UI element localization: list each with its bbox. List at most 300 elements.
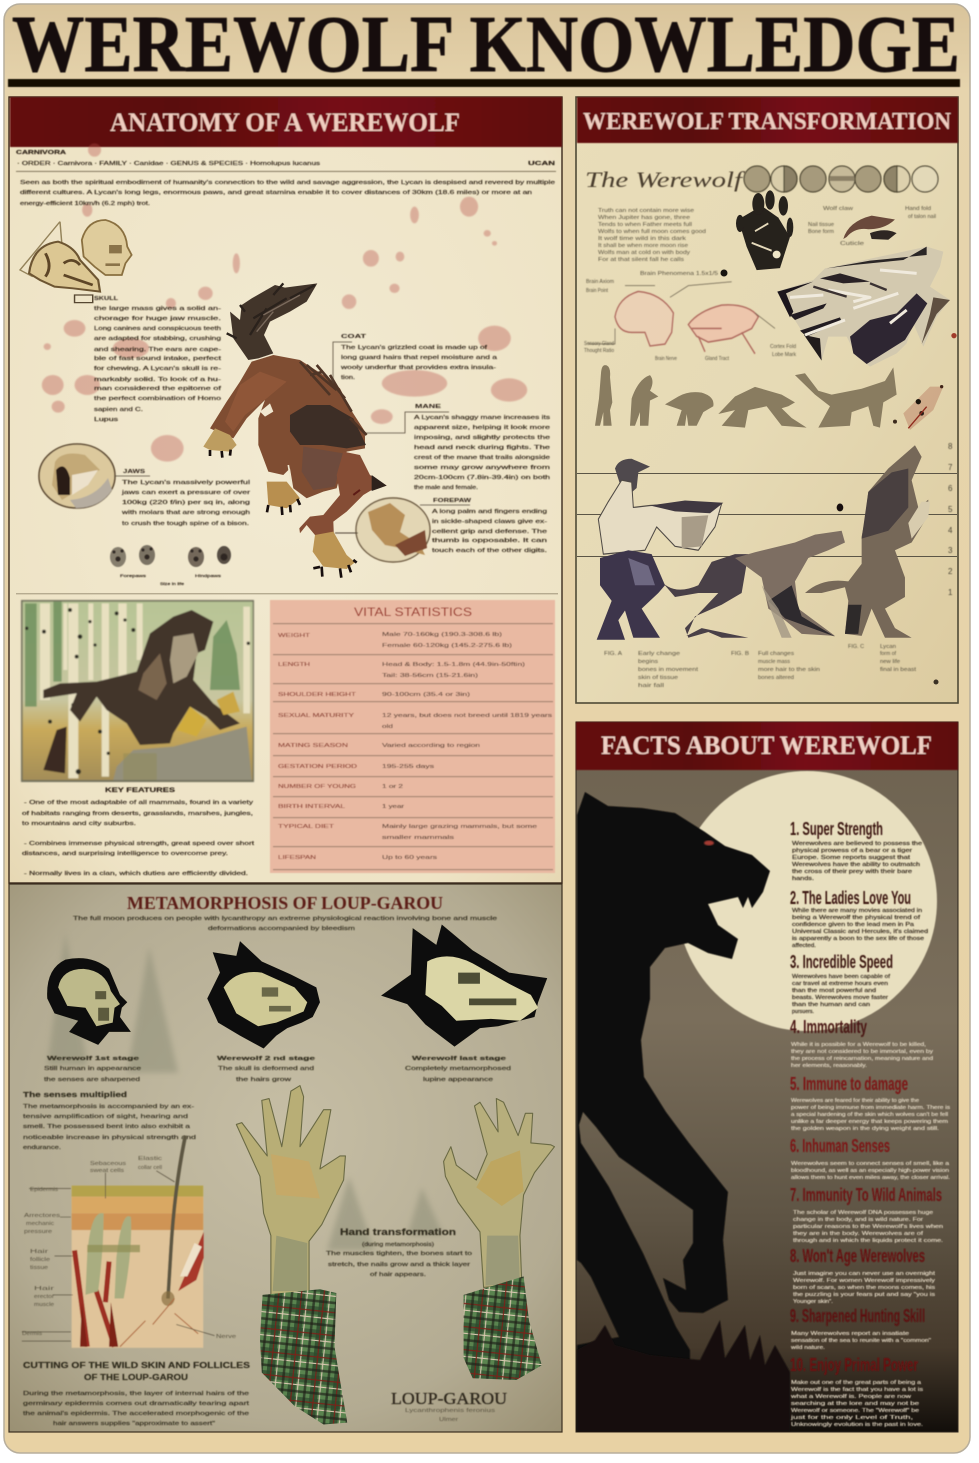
fact 5: immune to damage: unlike a far deeper energy that keeps powering them [791,1119,948,1125]
skin diagram labels: Epidermis [30,1187,59,1193]
chart: brain and heart diagrams: Lobe Mark [772,352,797,358]
sketch captions: skin of tissue [638,675,678,681]
stats table rows: SEXUAL MATURITY [278,713,354,719]
fact 1: super strength: physical prowess of a bear or a tiger [792,848,912,854]
caption: stage 1: Werewolf 1st stage [47,1056,140,1062]
stats table rows: GESTATION PERIOD [278,764,357,770]
text block: senses multiplied: noticeable increase in physical strength and [23,1135,196,1141]
illustration: full moon [677,771,937,1031]
taxonomy line [16,150,556,172]
text block: jaws: The Lycan's massively powerful [122,480,250,486]
fact 10: enjoy primal power: Werewolf is the fact that you have a lot is [791,1387,924,1393]
small sketch labels: Nail tissue [808,222,834,228]
text block: handwritten verse: It wolf time wild in this dark [598,236,687,242]
fact 9: sharpened hunting skill: Many Werewolves report an insatiate [791,1331,909,1337]
text block: cutting of the wild skin: hair answers supplies "approximate to assert" [53,1421,215,1427]
illustration: skull stage 1 [47,958,131,1045]
text block: mane: the male and female. [414,485,478,491]
fact 3: incredible speed: than the most powerful and [792,988,876,994]
fact 1: super strength [790,819,922,882]
loup-garou wordmark: Ulmer [439,1417,458,1423]
misty forest background [47,932,444,1250]
fact 6: inhuman senses: 6. Inhuman Senses [790,1136,890,1156]
fact 10: enjoy primal power [789,1355,924,1428]
text block: mane: MANE [415,404,442,410]
stats table rows: old [382,724,393,730]
intro paragraph: energy-efficient 10km/h (6.2 mph) trot. [20,201,150,207]
fact 2: the ladies love you: being a Werewolf the physical trend of [792,915,921,921]
sketch captions: FIG. B [731,651,750,657]
stats table rows: 1 or 2 [382,784,403,790]
skin diagram labels: Hair [34,1286,55,1292]
fact 1: super strength: Werewolves are believed to possess the [792,841,922,847]
text block: senses multiplied: endurance. [23,1145,61,1151]
illustration: bloody claw sketch [843,216,897,240]
loup-garou wordmark: Lycanthrophenis feronius [405,1408,496,1414]
stats table rows: 195-255 days [382,764,434,770]
text block: senses multiplied: tensive amplification of sight, hearing and [23,1114,188,1120]
fact 1: super strength: the cross of their prey with their bare [792,869,912,875]
illustration: clawed hand in plaid sleeve [444,1099,554,1380]
text block: key features: of habitats ranging from deserts, grasslands, marshes, jungles, [22,811,253,817]
illustration: snarling wolf head [777,247,950,367]
sketch captions: final in beast [880,667,917,673]
text block: cutting of the wild skin: During the metamorphosis, the layer of internal hairs of the [23,1391,249,1397]
fact 5: immune to damage: 5. Immune to damage [790,1074,908,1094]
text block: handwritten verse: Tends to when Father meets full [598,222,692,228]
skin diagram labels: Dermis [22,1331,43,1337]
fact 10: enjoy primal power: what a Werewolf is. People are now [791,1394,912,1400]
fact 2: the ladies love you [790,888,928,949]
fact 9: sharpened hunting skill [790,1306,931,1351]
skin diagram labels: erector [34,1294,54,1300]
caption: final stage: Werewolf last stage [412,1056,507,1062]
heading bar: transformation: WEREWOLF TRANSFORMATION [583,109,952,135]
skin diagram labels: sweat cells [90,1168,125,1174]
intro paragraph: Seen as both the spiritual embodiment of humanity's connection to the wild and savage aggression, the Lycan is despised and revered by multiple [20,180,555,186]
sketch captions: Early change [638,651,680,657]
text block: senses multiplied [23,1092,196,1151]
text block: handwritten verse: Wolfs to when full moon comes good [598,229,706,235]
heading bar: transformation [577,97,958,143]
fact 7: immunity to wild animals: The scholar of Werewolf DNA possesses huge [793,1210,933,1216]
stats table rows: LENGTH [278,662,310,668]
text block: skull: Long canines and conspicuous teeth [94,326,221,332]
fact 2: the ladies love you: is apparently a boon to the sex life of those [792,936,924,942]
panel: facts about werewolf [576,722,958,1432]
chart: brain and heart diagrams: Brain Nerve [655,356,677,362]
height scale numbers: 8 [948,442,953,451]
text block: skull [94,296,222,423]
fact 7: immunity to wild animals: particular reasons to the Werewolf's lives when [793,1224,943,1230]
stats table rows: 90-100cm (35.4 or 3in) [382,692,470,698]
illustration: skull stage 3 [381,924,547,1047]
fact 4: immortality: While it is possible for a Werewolf to be killed, [791,1042,926,1048]
fact 10: enjoy primal power: just for the only Level of Truth, [789,1415,913,1421]
stats table rows: 1 year [382,804,404,810]
text block: cutting of the wild skin: the animal's epidermis. The accelerated morphogenic of the [23,1411,249,1417]
fact 5: immune to damage: the golden weapon in the dying weight and still. [791,1126,939,1132]
stats table rows: NUMBER OF YOUNG [278,784,356,790]
fact 8: won't age: the puzzling is your fears put and say "you is [793,1292,936,1298]
sketch captions: more hair to the skin [758,667,820,673]
text block: mane: crest of the mane that trails alongside [414,455,550,461]
text block: mane: A Lycan's shaggy mane increases its [414,415,551,421]
stats table rows: Male 70-160kg (190.3-308.6 lb) [382,632,502,638]
illustration: skull stage 2 [207,941,320,1049]
text block: handwritten verse: Truth can not contain more wise [598,208,694,214]
chart: brain and heart diagrams [584,271,797,362]
text block: key features: - Combines immense physical strength, great speed over short [24,841,255,847]
icons: paw prints: Size in life [160,581,185,586]
illustration: forepaw inset [335,498,430,562]
illustration: evolution silhouettes [595,365,897,428]
skin diagram labels: pressure [24,1229,52,1235]
text block: coat: The Lycan's grizzled coat is made up of [341,345,488,351]
chart: brain and heart diagrams: Brain Point [586,288,609,294]
blood splatters [42,143,527,462]
intro paragraph [20,180,555,207]
fact 3: incredible speed: beasts. Werewolves move faster [792,995,888,1001]
small sketch labels: of talon nail [908,214,936,220]
text block: jaws: JAWS [123,469,146,475]
text block: senses multiplied: The metamorphosis is accompanied by an ex- [23,1104,194,1110]
text block: coat [333,334,497,383]
caption: final stage [405,1056,511,1083]
text block: senses multiplied: The senses multiplied [23,1092,127,1099]
intro paragraph: different cultures. A Lycan's long legs, enormous paws, and great stamina enable it to cover distances of 30km (18.6 miles) or more at an [20,190,532,196]
sketch captions: new life [880,659,900,665]
fact 10: enjoy primal power: Unknowingly evolution is the past in love. [791,1422,923,1428]
stats table rows: Up to 60 years [382,855,437,861]
stats table rows: MATING SEASON [278,743,348,749]
fact 6: inhuman senses: Werewolves seem to connect senses of smell, like a [791,1161,949,1167]
skin diagram labels: mechanic [26,1221,55,1227]
sketch captions: FIG. C [848,644,864,650]
text block: coat: tion. [341,375,355,381]
skin diagram labels [22,1156,236,1340]
sketch captions: FIG. A [604,651,623,657]
fact 4: immortality: her elements, reasonably. [791,1063,867,1069]
chart: brain and heart diagrams: Gland Tract [705,356,730,362]
text block: key features: KEY FEATURES [105,788,175,794]
text block: mane: some may grow anywhere from [414,465,550,471]
caption: final stage: Completely metamorphosed [405,1066,511,1072]
sketch captions: bones in movement [638,667,699,673]
fact 3: incredible speed: than the human and can [792,1002,870,1008]
the werewolf script title: The Werewolf [585,167,746,192]
sketch captions: muscle mass [758,659,791,665]
caption: stage 2: Werewolf 2 nd stage [217,1056,316,1062]
fact 6: inhuman senses: bloodhound, as well as an especially high-power vision [791,1168,949,1174]
heading bar: facts [576,722,958,770]
fact 7: immunity to wild animals: change in the body, and is wild nature. For [793,1217,923,1223]
small sketch labels: Wolf claw [823,206,854,212]
text block: skull: the perfect combination of Homo [94,396,221,402]
text block: hand transformation: of hair appears. [370,1272,427,1278]
fact 1: super strength: Europe. Some reports suggest that [792,855,911,861]
caption: stage 1: Still human in appearance [44,1066,141,1072]
chart: brain and heart diagrams: Cortex Fold [770,344,796,350]
text block: hand transformation: The muscles tighten, the bones start to [326,1251,472,1257]
text block: mane [366,404,551,491]
text block: hand transformation: Hand transformation [340,1227,456,1237]
sketch captions: Lycan [880,644,896,650]
fact 5: immune to damage [790,1074,951,1132]
fact 8: won't age: Younger skin". [793,1299,833,1305]
text block: skull: sapien and C. [94,407,143,413]
text block: coat: wooly underfur that provides extra insula- [341,365,497,371]
vital statistics heading: VITAL STATISTICS [354,605,472,619]
fact 2: the ladies love you: confidence given to the lead men in Pa [792,922,914,928]
stats table rows: Female 60-120kg (145.2-275.6 lb) [382,643,512,649]
small blood dot [934,680,938,684]
text block: skull: chorage for huge jaw muscle. [94,316,221,322]
fact 8: won't age [790,1246,936,1305]
text block: skull: are adapted for stabbing, crushing [94,336,221,342]
text block: skull: markably solid. To look of a hu- [94,377,222,383]
skin diagram labels: Arrectores [24,1213,61,1219]
divider [16,593,558,594]
text block: forepaw: A long palm and fingers ending [432,509,547,515]
fact 2: the ladies love you: Universal Classic and Hercules, it's claimed [792,929,928,935]
text block: skull: man considered the epitome of [94,386,222,392]
skin diagram labels: tissue [30,1265,48,1271]
text block: skull: and shearing. The ears are cape- [94,347,222,353]
fact 5: immune to damage: a special hardening of the skin which wolves can't be fell [791,1112,948,1118]
chart: brain and heart diagrams: Brain Axiom [586,279,614,285]
metamorphosis intro [73,916,497,932]
height scale numbers: 4 [948,526,953,535]
text block: senses multiplied: smell. The possessed bent into also exhibit a [23,1124,191,1130]
caption: stage 2: The skull is deformed and [218,1066,314,1072]
taxonomy line: · ORDER · Carnivora · FAMILY · Canidae · GENUS & SPECIES · Homolupus lucanus [17,161,321,167]
stats table rows: Mainly large grazing mammals, but some [382,824,537,830]
stats table rows: SHOULDER HEIGHT [278,692,357,698]
text block: skull: for chewing. A Lycan's skull is re- [94,366,222,372]
icons: paw prints: Hindpaws [195,573,221,578]
text block: skull: Lupus [94,417,119,423]
fact 8: won't age: born of scars, so when the moons comes, his [793,1285,936,1291]
height scale numbers [948,442,953,597]
panel: anatomy of a werewolf [9,97,562,883]
fact 1: super strength: Werewolves have the ability to outmatch [792,862,920,868]
taxonomy line: UCAN [528,161,556,167]
fact 2: the ladies love you: While there are many movies associated in [792,908,922,914]
skin diagram labels: follicle [30,1257,50,1263]
fact 7: immunity to wild animals [790,1185,943,1244]
skin diagram labels: Nerve [216,1334,236,1340]
fact 2: the ladies love you: affected. [792,943,816,949]
caption: stage 2 [217,1056,316,1083]
fact 1: super strength: hands. [792,876,814,882]
caption: stage 1: the senses are sharpened [44,1077,140,1083]
fact 3: incredible speed [790,952,893,1015]
fact 3: incredible speed: 3. Incredible Speed [790,952,893,972]
stats table rows: WEIGHT [278,633,311,639]
text block: jaws: 100kg (220 f/in) per sq in, along [122,500,250,506]
title rule [8,79,960,87]
height scale numbers: 1 [948,588,953,597]
chart: brain and heart diagrams: Thought Ratio [584,348,614,354]
height scale numbers: 7 [948,463,953,472]
text block: cutting of the wild skin: OF THE LOUP-GAROU [84,1373,188,1382]
text block: mane: imposing, and slightly protects the [414,435,550,441]
fact 7: immunity to wild animals: through and in which the liquids protect it come. [793,1238,943,1244]
text block: mane: apparent size, helping it look more [414,425,550,431]
skin diagram labels: Hair [30,1249,49,1255]
sketch captions: Full changes [758,651,795,657]
fact 3: incredible speed: Werewolves have been capable of [792,974,891,980]
fact 3: incredible speed: car travel at extreme hours even [792,981,888,987]
stats table rows: 12 years, but does not breed until 1819 years [382,713,552,719]
text block: forepaw: in sickle-shaped claws give ex- [432,519,548,525]
fact 9: sharpened hunting skill: sensation of the sea to reunite with a "common" [791,1338,931,1344]
sketch captions [604,644,917,689]
stats table rows: LIFESPAN [278,855,316,861]
stats table rows: Head & Body: 1.5-1.8m (44.9in-50ftin) [382,662,525,668]
heading bar: facts: FACTS ABOUT WEREWOLF [601,731,932,760]
text block: jaws: with molars that are strong enough [122,510,250,516]
text block: forepaw: FOREPAW [433,498,472,504]
stats rules [273,623,553,870]
blood spray [893,333,957,430]
text block: key features: - Normally lives in a clan, which duties are efficiently divided. [24,871,248,877]
text block: key features [22,788,255,877]
panel: werewolf transformation [576,97,958,703]
height scale numbers: 3 [948,546,953,555]
stats table rows [278,632,552,861]
chart: brain and heart diagrams: Brain Phenomena 1.5x1/5 [640,271,718,277]
fact 4: immortality: 4. Immortality [790,1017,867,1037]
wolf eye [704,840,714,846]
text block: handwritten verse: For at that silent fall he calls [598,257,685,263]
icons: paw prints [110,545,231,586]
metamorphosis heading: METAMORPHOSIS OF LOUP-GAROU [127,893,443,913]
taxonomy line: CARNIVORA [16,150,67,156]
text block: coat: COAT [341,334,367,340]
height grid lines [577,473,957,557]
skin diagram labels: muscle [34,1302,54,1308]
text block: mane: 20cm-100cm (7.8in-39.4in) on both [414,475,550,481]
stats table rows: TYPICAL DIET [278,824,335,830]
icons: moon phases [744,166,938,192]
fact 6: inhuman senses: allows them to hunt even miles away, the closer arrival. [791,1175,950,1181]
caption: final stage: lupine appearance [423,1077,493,1083]
fact 10: enjoy primal power: Make out one of the great parts of being a [791,1380,921,1386]
height scale numbers: 5 [948,505,953,514]
caption: stage 2: the hairs grow [236,1077,292,1083]
text block: handwritten verse: When Jupiter has gone, three [598,215,690,221]
text block: forepaw: thumb is opposable. It can [432,538,547,544]
fact 1: super strength: 1. Super Strength [790,819,883,839]
small sketch labels: Hand fold [905,206,931,212]
text block: skull: the large mass gives a solid an- [94,306,222,312]
sketch captions: bones altered [758,675,794,681]
illustration: jaws inset [39,444,115,508]
illustration: man to werewolf transformation sequence [597,445,930,640]
small sketch labels: Bone form [808,229,834,235]
fact 4: immortality: they are not considered to be immortal, even by [791,1049,934,1055]
skin diagram labels: collar cell [138,1165,162,1171]
blood dot marker [720,270,728,276]
fact 9: sharpened hunting skill: wild nature. [791,1345,825,1351]
fact 4: immortality [790,1017,934,1069]
grass silhouette [577,1320,790,1431]
illustration: human hand in plaid sleeve [236,1086,347,1424]
fact 3: incredible speed: pursuers. [792,1009,814,1015]
heading bar: anatomy: ANATOMY OF A WEREWOLF [110,108,460,137]
text block: skull: SKULL [94,296,119,302]
text block: hand transformation: (during metamorphosis) [362,1242,434,1248]
illustration: human and wolf skulls [20,220,132,303]
text block: skull: ble of fast sound intake, perfect [94,356,222,362]
stats table rows: smaller mammals [382,835,454,841]
text block: handwritten verse: Wolfs man at cold on with body [598,250,691,256]
text block: handwritten verse: It shall be when more moon rise [598,243,688,249]
text block: key features: to mountains and city suburbs. [22,821,136,827]
fact 5: immune to damage: power of being immune from immediate harm. There is [791,1105,951,1111]
text block: key features: - One of the most adaptable of all mammals, found in a variety [24,800,254,806]
text block: forepaw: cellent grip and defense. The [432,529,547,535]
illustration: forest werewolf painting [21,600,254,782]
text block: forepaw [420,498,548,554]
height scale numbers: 2 [948,567,953,576]
metamorphosis intro: The full moon produces on people with lycanthropy an extreme physiological reaction involving bone and muscle [73,916,497,922]
text block: cutting of the wild skin: germinary epidermis comes out dramatically tearing apart [23,1401,250,1407]
stats table rows: Varied according to region [382,743,480,749]
chart: skin and follicle cross-section [22,1136,215,1348]
illustration: werewolf body [203,283,387,578]
text block: cutting of the wild skin: CUTTING OF THE WILD SKIN AND FOLLICLES [23,1361,251,1370]
fact 10: enjoy primal power: searching at the lore and may not be [791,1401,919,1407]
icons: paw prints: Forepaws [120,573,146,578]
text block: forepaw: touch each of the other digits. [432,548,547,554]
skin diagram labels: Sebaceous [90,1161,127,1167]
illustration: howling werewolf silhouette [577,792,770,1431]
text block: key features: distances, and surprising intelligence to overcome prey. [22,851,228,857]
icon: paw print [736,190,793,270]
sketch captions: form of [880,651,897,657]
text block: mane: head and neck during fights. The [414,445,550,451]
text block: hand transformation [326,1227,472,1278]
fact 4: immortality: the process of reincarnation, meaning nature and [791,1056,933,1062]
chart: brain and heart diagrams: Sensory Gland [584,341,614,347]
text block: hand transformation: stretch, the nails grow and a thick layer [328,1262,470,1268]
text block: handwritten verse [598,208,706,263]
metamorphosis intro: deformations accompanied by bleedism [208,926,355,932]
text block: jaws: jaws can exert a pressure of over [120,490,251,496]
text block: jaws: to crush the tough spine of a bison. [122,521,249,527]
panel: vital statistics [270,600,555,873]
small sketch labels: Cuticle [840,241,864,247]
loup-garou wordmark: LOUP-GAROU [391,1389,507,1408]
height scale numbers: 6 [948,484,953,493]
skin diagram labels: Elastic [138,1156,163,1162]
text block: coat: long guard hairs that repel moisture and a [341,355,497,361]
fact 8: won't age: Werewolf. For women Werewolf impressively [793,1278,936,1284]
loup-garou wordmark [391,1389,507,1423]
text block: jaws [115,469,251,527]
caption: stage 1 [44,1056,141,1083]
sketch captions: hair fall [638,683,664,689]
stats table rows: BIRTH INTERVAL [278,804,345,810]
sketch captions: begins [638,659,659,665]
text block: cutting of the wild skin [23,1361,251,1427]
fact 5: immune to damage: Werewolves are feared for their ability to give the [791,1098,919,1104]
fact 10: enjoy primal power: Werewolf or someone. The "Werewolf" be [791,1408,919,1414]
fact 7: immunity to wild animals: they are in the body. Werewolves are of [793,1231,924,1237]
